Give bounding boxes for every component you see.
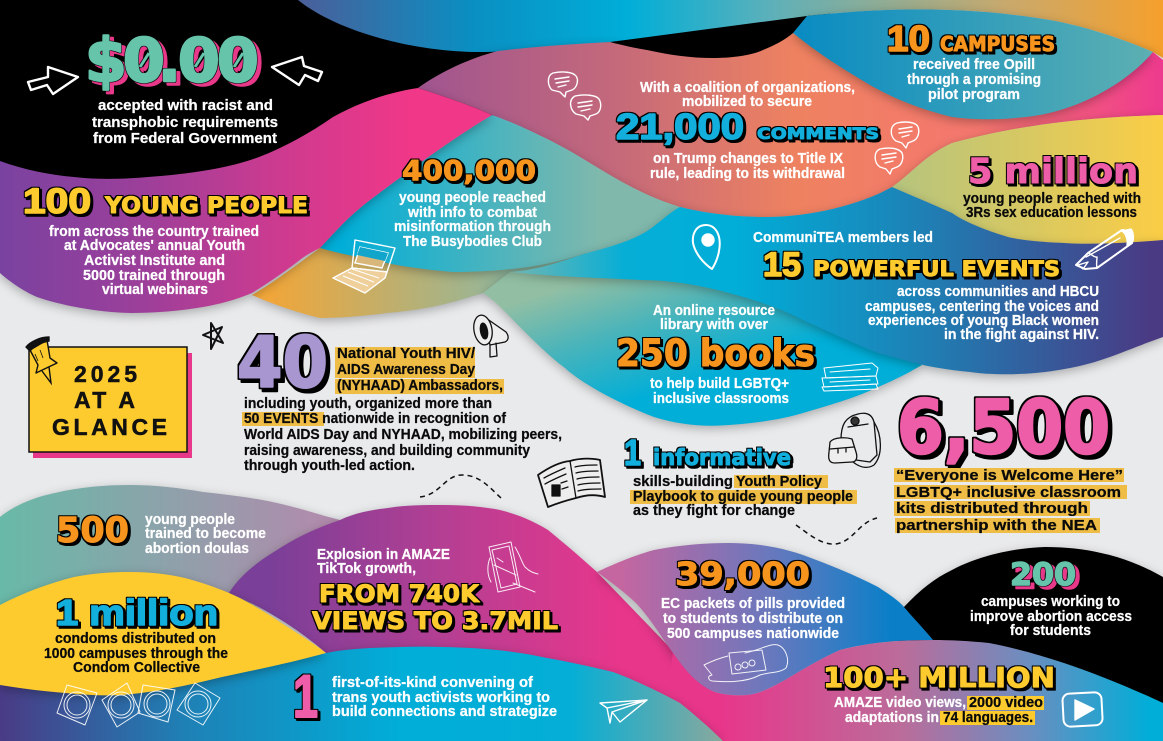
stat: 400,000: misinformation through [394,219,551,235]
stat: 21,000 comments: mobilized to secure [682,94,812,110]
stat: 5 million: 5 million [968,152,1138,192]
stat: 39,000: 39,000 [675,555,810,593]
panel background: CommuniTEA [510,187,1163,374]
title box: 2025 at a glance: GLANCE [52,414,167,440]
stat: 200 campuses: for students [1010,623,1091,639]
stat: 6,500: “Everyone is Welcome Here” [896,467,1123,484]
stat: 250 books [616,303,815,407]
stat: 100+ million: 74 languages. [943,710,1033,726]
stat: TikTok growth: VIEWS TO 3.7MIL [312,607,558,635]
stat: 15 powerful events: experiences of young Black women [868,313,1099,329]
title box: 2025 at a glance: AT A [74,387,135,413]
stat: 21,000 comments [616,80,879,182]
stat: 1 million condoms: condoms distributed on [55,631,216,647]
stat: 39,000 [661,555,845,642]
panel background: 100+ million [660,640,1163,741]
stat: TikTok growth: Explosion in AMAZE [317,547,450,563]
stat: 40 ambassadors: (NYHAAD) Ambassadors, [337,378,503,394]
stat: $0.00: accepted with racist and [98,98,273,114]
stat: $0.00: from Federal Government [93,131,277,147]
icon: megaphone [472,314,508,357]
stat: 400,000: young people reached [399,190,546,206]
stat: 15 powerful events: in the fight against HIV. [944,327,1099,343]
decoration: dashed curve left [420,475,501,498]
stat: 1 million condoms: 1000 campuses through the [44,646,228,662]
icon: push pin [26,337,57,383]
stat: 15 powerful events: POWERFUL EVENTS [813,257,1060,281]
stat: 100 young people: 100 [23,182,91,221]
stat: 100 young people: at Advocates' annual Youth [64,238,245,254]
stat: 39,000: to students to distribute on [663,611,843,627]
stat: 6,500: LGBTQ+ inclusive classroom [896,484,1121,501]
icon: hand holding phone [488,542,538,592]
icon: cursor left [28,67,78,94]
stat: 40 ambassadors [237,322,562,474]
stat: 40 ambassadors: including youth, organized more than [244,396,492,412]
stat: 100+ million [823,661,1055,726]
panel background: 100 young people [0,88,492,313]
panel background: 10 campuses [793,9,1153,119]
panel background: orange ribbon [252,248,600,318]
panel background: 200 campuses [880,547,1163,741]
stat: 1 million condoms [44,592,228,676]
panel background: 400,000 [320,115,680,272]
icon: pencil [1076,229,1133,269]
stat: 1 informative: informative [653,446,791,471]
icon: star [203,323,223,349]
panel background: AMAZE TikTok [229,505,760,741]
stat: 40 ambassadors: raising awareness, and building community [244,443,530,459]
title box: 2025 at a glance [29,347,192,458]
stat: 6,500: 6,500 [897,385,1110,471]
icon: paper airplane [600,700,647,723]
icon: play button [1062,692,1103,727]
stat: 100+ million: AMAZE video views, [834,695,966,711]
stat: 400,000 [394,154,551,250]
stat: 1 informative: Playbook to guide young people [633,489,853,505]
stat: 200 campuses: 200 [1010,557,1076,593]
stat: 100+ million: 100+ MILLION [823,661,1055,694]
stat: $0.00 [85,26,278,147]
stat: 15 powerful events: across communities and HBCU [897,284,1099,300]
stat: 400,000: 400,000 [402,154,536,187]
stat: 6,500 [894,385,1127,534]
icon: condom packets [57,683,220,727]
icon: open book [538,459,605,507]
stat: 10 campuses: 10 [887,18,930,59]
icon: chat bubbles right [875,122,919,174]
panel background: bottom band [0,647,723,741]
stat: 10 campuses [887,18,1055,103]
stat: 500 doulas: trained to become [145,526,266,542]
stat: 100 young people: from across the country trained [49,224,259,240]
stat: 200 campuses [970,557,1132,639]
stat: 100 young people: YOUNG PEOPLE [104,194,308,219]
stat: 21,000 comments: COMMENTS [757,124,879,143]
title box: 2025 at a glance: 2025 [74,361,137,387]
icon: laptop [333,240,395,293]
stat: 15 powerful events [753,230,1099,343]
panel background: black top-left [0,0,830,200]
stat: 100+ million: adaptations in [845,710,939,726]
decoration: dashed curve right [796,518,877,544]
stat: 100 young people: virtual webinars [102,282,208,298]
stat: 40 ambassadors: National Youth HIV/ [337,346,475,362]
icon: stack of books [822,363,878,391]
stat: 39,000: 500 campuses nationwide [667,626,839,642]
icon: backpack [829,413,880,467]
stat: 250 books: to help build LGBTQ+ [650,376,789,392]
stat: 40 ambassadors: AIDS Awareness Day [337,362,475,378]
stat: 250 books: inclusive classrooms [653,391,789,407]
stat: 40 ambassadors: 50 EVENTS nationwide in recognition of [244,411,506,427]
panel background: 5 million [892,115,1163,244]
stat: 1 convening: build connections and strategize [332,704,557,720]
stat: 250 books: An online resource [653,303,775,319]
stat: 1 informative: 1 [624,432,641,473]
stat: 400,000: The Busybodies Club [403,234,542,250]
stat: 250 books: library with over [660,317,768,333]
stat: 500 doulas: young people [145,512,235,528]
stat: 15 powerful events: campuses, centering the voices and [865,299,1099,315]
stat: 21,000 comments: With a coalition of organizations, [640,80,855,96]
panel background: 39,000 [597,543,933,695]
stat: 40 ambassadors: through youth-led action. [244,458,415,474]
icon: chat bubbles left [548,72,601,120]
stat: 200 campuses: campuses working to [981,594,1120,610]
stat: $0.00: $0.00 [85,26,259,96]
icon: hands passing pills [704,645,788,682]
stat: 15 powerful events: CommuniTEA members led [753,230,933,246]
stat: TikTok growth [312,547,558,635]
stat: 21,000 comments: rule, leading to its withdrawal [650,166,845,182]
panel background: top gradient band [298,0,1163,58]
stat: 6,500: kits distributed through [896,500,1088,517]
stat: 6,500: partnership with the NEA [896,517,1097,534]
stat: TikTok growth: FROM 740K [319,580,480,608]
stat: 10 campuses: through a promising [907,72,1041,88]
stat: 500 doulas: 500 [56,511,129,551]
stat: 5 million [963,152,1141,221]
panel background: 1 million [0,572,326,695]
stat: 500 doulas: abortion doulas [145,541,249,557]
stat: 21,000 comments: on Trump changes to Title IX [653,151,843,167]
stat: 1 convening: first-of-its-kind convening of [332,675,533,691]
stat: 1 informative: skills-building [633,474,733,490]
stat: 40 ambassadors: 40 [237,322,328,404]
stat: 1 informative [624,432,857,519]
stat: 100 young people: 5000 trained through [83,268,225,284]
stat: 10 campuses: pilot program [928,87,1020,103]
stat: 10 campuses: received free Opill [913,57,1035,73]
stat: 40 ambassadors: World AIDS Day and NYHAAD, mobilizing peers, [244,427,562,443]
icon: location pin [693,225,720,269]
stat: 21,000 comments: 21,000 [616,106,744,147]
panel background: coalition comments [418,33,1163,217]
stat: 5 million: 3Rs sex education lessons [966,205,1137,221]
stat: 5 million: young people reached with [963,191,1141,207]
stat: 1 informative: as they fight for change [633,503,795,519]
stat: 15 powerful events: 15 [763,246,801,284]
stat: 1 million condoms: Condom Collective [73,660,200,676]
stat: 400,000: with info to combat [407,205,537,221]
stat: 1 million condoms: 1 million [56,592,218,633]
stat: 1 convening: trans youth activists working to [332,690,550,706]
panel background: 250 books [483,270,922,426]
stat: 100 young people [23,182,308,298]
stat: 500 doulas [56,511,266,557]
stat: 39,000: EC packets of pills provided [661,596,845,612]
stat: 100 young people: Activist Institute and [84,253,225,269]
stat: 10 campuses: CAMPUSES [940,32,1055,56]
stat: $0.00: transphobic requirements [92,115,278,131]
stat: 100+ million: 2000 video [969,695,1043,711]
stat: TikTok growth: TikTok growth, [317,561,416,577]
stat: 250 books: 250 books [616,332,815,375]
stat: 1 informative: Youth Policy [736,474,822,490]
icon: cursor right [272,57,322,85]
stat: 1 convening: 1 [293,663,318,730]
stat: 200 campuses: improve abortion access [970,609,1132,625]
panel background: 500 doulas [0,485,340,620]
stat: 1 convening [293,663,557,730]
